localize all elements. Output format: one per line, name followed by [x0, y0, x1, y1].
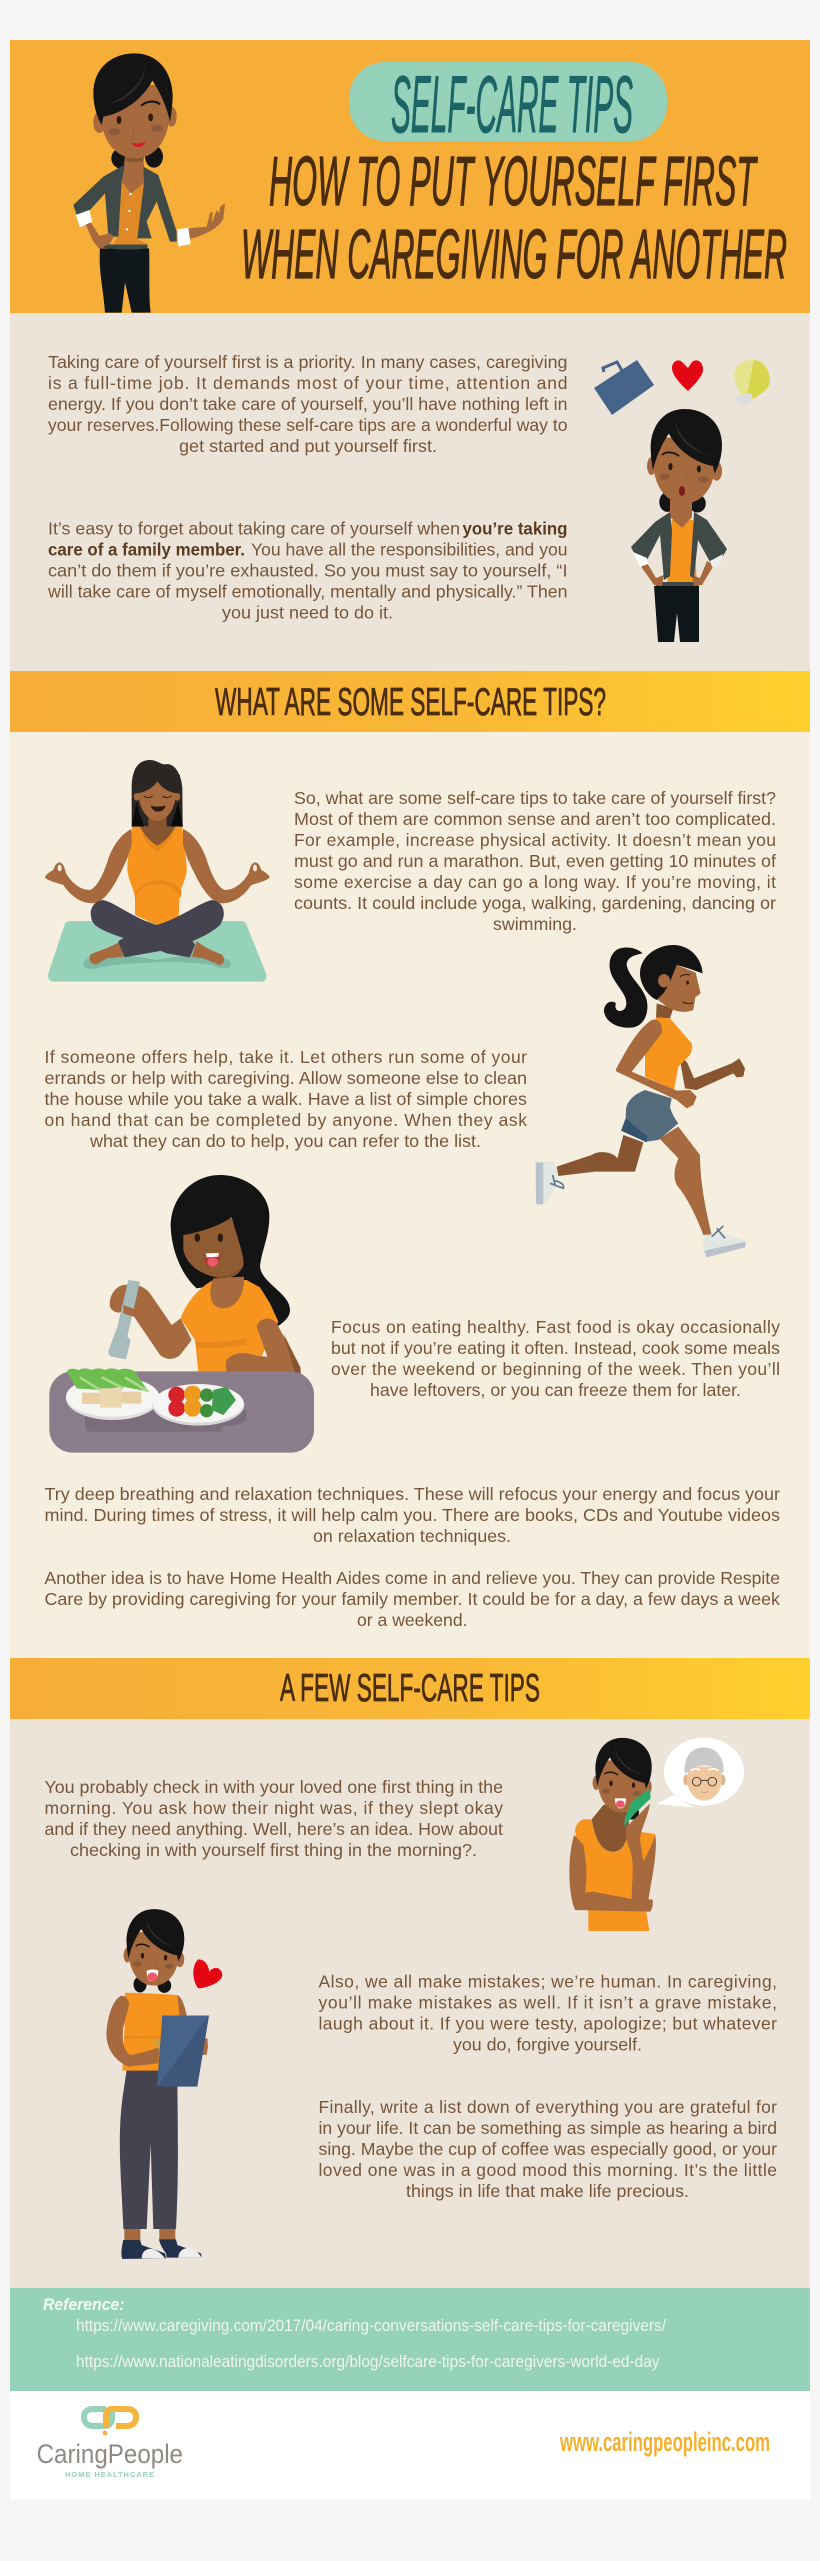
illustration: running woman [536, 945, 746, 1257]
text block: gratitude tip: Finally, write a list down of everything you are grateful for [318, 2097, 777, 2117]
text block: exercise tip [294, 788, 776, 934]
icon: heart [672, 360, 703, 391]
panel: references: https://www.nationaleatingdisorders.org/blog/selfcare-tips-for-caregivers-world-ed-day [76, 2353, 660, 2371]
text block: intro paragraph 1: your reserves.Following these self-care tips are a wonderful way to [48, 415, 568, 435]
text block: intro paragraph 1: energy. If you don’t take care of yourself, you’ll have nothing left in [48, 394, 568, 414]
text block: intro paragraph 2: can’t do them if you’re exhausted. So you must say to yourself, “I [48, 560, 568, 580]
illustration: woman eating [49, 1175, 314, 1453]
text block: home health aides tip [44, 1568, 780, 1630]
text block: home health aides tip: or a weekend. [357, 1610, 468, 1630]
illustration: yoga woman [45, 760, 270, 982]
panel: references: https://www.caregiving.com/2017/04/caring-conversations-self-care-tips-for-caregivers/ [76, 2317, 666, 2335]
text block: intro paragraph 2: You have all the responsibilities, and you [251, 540, 568, 560]
text block: exercise tip: Most of them are common sense and aren’t too complicated. [294, 809, 776, 829]
text block: exercise tip: counts. It could include yoga, walking, gardening, dancing or [294, 893, 776, 913]
text block: relaxation tip: mind. During times of stress, it will help calm you. There are books, CDs and Youtube videos [44, 1505, 780, 1525]
text block: intro paragraph 2: It’s easy to forget about taking care of yourself when [48, 518, 460, 538]
text block: intro paragraph 1: Taking care of yourself first is a priority. In many cases, caregiving [48, 352, 568, 372]
text block: healthy eating tip: Focus on eating healthy. Fast food is okay occasionally [331, 1317, 780, 1337]
text block: morning check-in [44, 1777, 503, 1860]
title [241, 142, 787, 293]
text block: mistakes tip: you do, forgive yourself. [453, 2034, 642, 2054]
speech bubble: elderly parent [657, 1738, 744, 1807]
illustration: woman on phone [569, 1738, 656, 1931]
illustration: header woman [73, 53, 225, 313]
panel: introduction [10, 313, 810, 671]
text block: gratitude tip [318, 2097, 777, 2201]
text block: exercise tip: So, what are some self-care tips to take care of yourself first? [294, 788, 776, 808]
text block: gratitude tip: sing. Maybe the cup of coffee was especially good, or your [318, 2139, 777, 2159]
text block: healthy eating tip: have leftovers, or you can freeze them for later. [370, 1380, 741, 1400]
text block: morning check-in: You probably check in with your loved one first thing in the [44, 1777, 503, 1797]
text block: accept help tip: errands or help with caregiving. Allow someone else to clean [44, 1068, 527, 1088]
text block: intro paragraph 2: will take care of myself emotionally, mentally and physically.” Then [47, 582, 568, 602]
text block: accept help tip: on hand that can be completed by anyone. When they ask [44, 1110, 527, 1130]
text block: accept help tip [44, 1047, 527, 1151]
text block: healthy eating tip: but not if you’re eating it often. Instead, cook some meals [331, 1338, 780, 1358]
text block: accept help tip: what they can do to help, you can refer to the list. [89, 1131, 481, 1151]
text block: gratitude tip: in your life. It can be something as simple as hearing a bird [318, 2118, 777, 2138]
text block: healthy eating tip [331, 1317, 780, 1400]
text block: intro paragraph 1: get started and put yourself first. [179, 436, 437, 456]
text block: exercise tip: must go and run a marathon. But, even getting 10 minutes of [294, 851, 776, 871]
text block: intro paragraph 2: you just need to do it. [222, 602, 393, 622]
panel: a few tips body [10, 1719, 810, 2288]
text block: relaxation tip [44, 1484, 780, 1546]
icon: small heart [193, 1959, 222, 1988]
text block: healthy eating tip: over the weekend or beginning of the week. Then you’ll [331, 1359, 780, 1379]
text block: morning check-in: morning. You ask how their night was, if they slept okay [44, 1798, 503, 1818]
text block: intro paragraph 2: care of a family member. [48, 540, 245, 560]
text block: accept help tip: If someone offers help, take it. Let others run some of your [44, 1047, 527, 1067]
logo: Caring People Home Healthcare [37, 2409, 183, 2479]
text block: mistakes tip [318, 1972, 777, 2054]
text block: gratitude tip: loved one was in a good mood this morning. It’s the little [318, 2160, 777, 2180]
text block: relaxation tip: Try deep breathing and relaxation techniques. These will refocus your energy and focus your [44, 1484, 780, 1504]
panel: references: Reference: [43, 2296, 124, 2314]
icon: light bulb [734, 360, 770, 407]
badge: self-care tips pill [349, 60, 667, 150]
section heading bar: a few self-care tips [10, 1658, 810, 1719]
logo: Caring People Home Healthcare: HOME HEALTHCARE [65, 2470, 154, 2479]
text block: accept help tip: the house while you take a walk. Have a list of simple chores [44, 1089, 527, 1109]
text block: home health aides tip: Another idea is to have Home Health Aides come in and relieve you. They can provide Respite [44, 1568, 780, 1588]
text block: morning check-in: checking in with yourself first thing in the morning?. [70, 1840, 477, 1860]
illustration: thinking woman [631, 409, 727, 642]
text block: exercise tip: For example, increase physical activity. It doesn’t mean you [294, 830, 776, 850]
text block: gratitude tip: things in life that make life precious. [406, 2181, 689, 2201]
section heading bar: what are some self-care tips [10, 671, 810, 732]
panel: footer [10, 2391, 810, 2499]
logo: Caring People Home Healthcare: CaringPeople [37, 2439, 183, 2469]
text block: mistakes tip: Also, we all make mistakes; we’re human. In caregiving, [318, 1972, 777, 1992]
icon: briefcase [594, 360, 654, 415]
text block: intro paragraph 1 [48, 352, 568, 456]
text block: home health aides tip: Care by providing caregiving for your family member. It could be for a day, a few days a week [44, 1589, 780, 1609]
section heading bar: a few self-care tips: A FEW SELF-CARE TIPS [280, 1667, 540, 1710]
text block: intro paragraph 2 [47, 518, 568, 622]
text block: intro paragraph 1: is a full-time job. It demands most of your time, attention and [48, 373, 568, 393]
text block: morning check-in: and if they need anything. Well, here’s an idea. How about [44, 1819, 503, 1839]
illustration: woman with clipboard [106, 1909, 209, 2259]
text block: mistakes tip: you’ll make mistakes as well. If it isn’t a grave mistake, [318, 1992, 777, 2012]
panel: what are some tips body [10, 732, 810, 1658]
text block: exercise tip: swimming. [493, 914, 577, 934]
panel: header banner [10, 40, 810, 313]
text block: intro paragraph 2: you’re taking [462, 518, 568, 538]
panel: references [10, 2288, 810, 2391]
text block: mistakes tip: laugh about it. If you were testy, apologize; but whatever [318, 2014, 777, 2034]
text block: relaxation tip: on relaxation techniques. [313, 1526, 511, 1546]
text block: exercise tip: some exercise a day can go a long way. If you’re moving, it [294, 872, 776, 892]
